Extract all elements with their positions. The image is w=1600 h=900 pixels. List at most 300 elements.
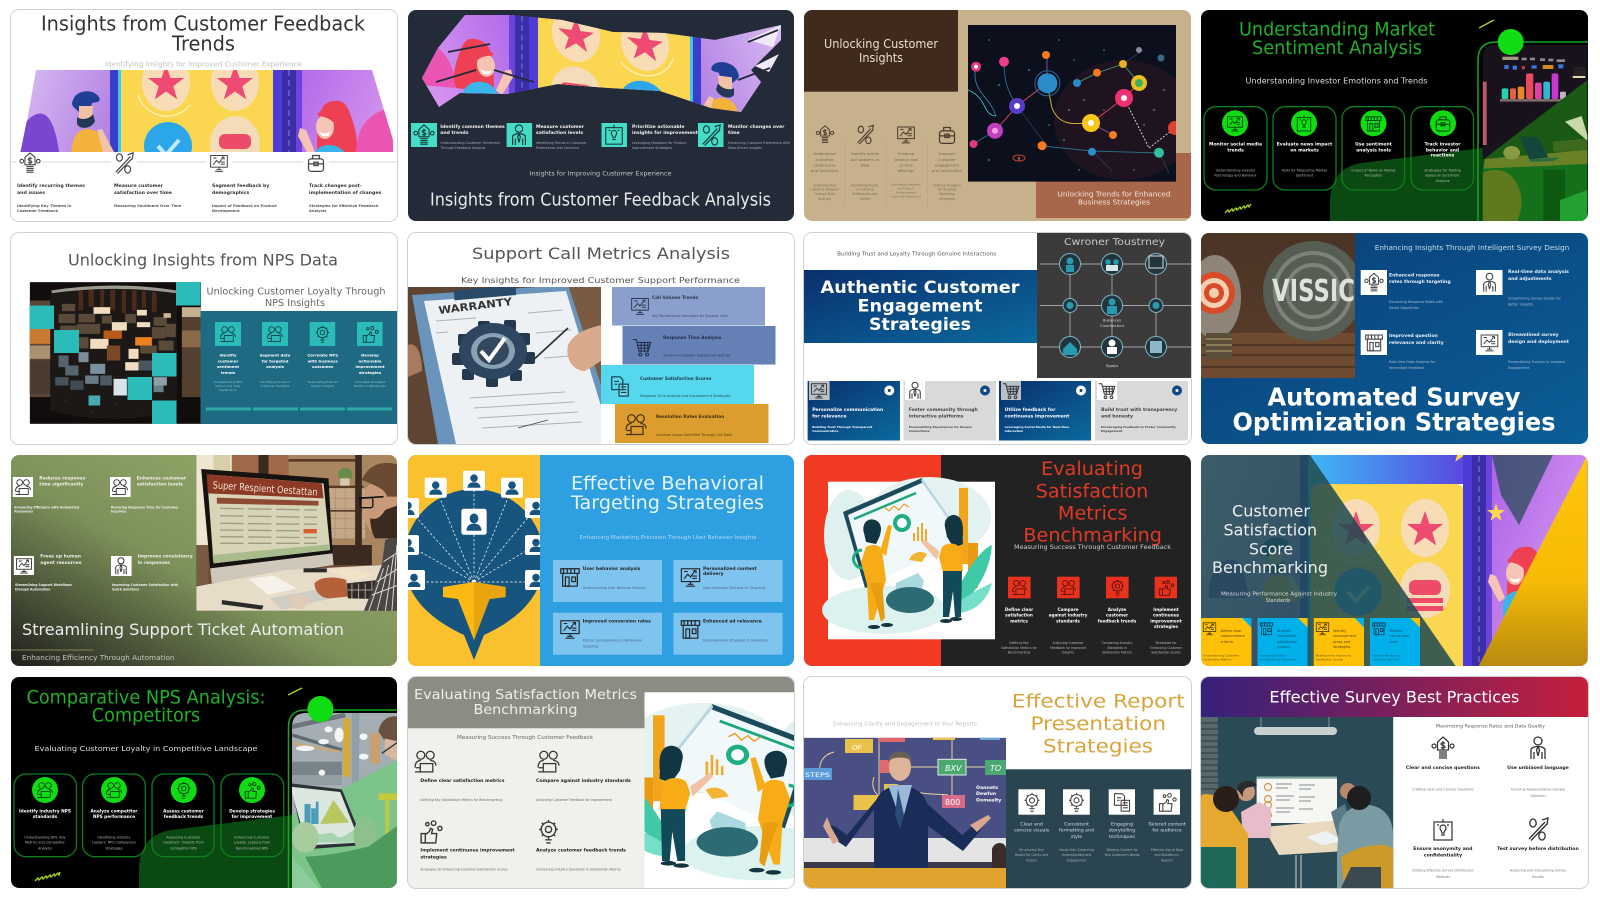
column descriptions: Metrics and Their: [215, 384, 241, 388]
card: personalized content: Data Collection Methods for Targeting: [702, 586, 765, 590]
title: Satisfaction: [1224, 521, 1317, 540]
goals descriptions: Customer Behavior: [810, 188, 840, 192]
practice: test survey: Results: [1532, 875, 1544, 879]
steps headings: Segment feedback by: [212, 183, 269, 189]
column headings: Implement: [1153, 607, 1179, 612]
subtitle: Measuring Performance Against Industry: [1221, 592, 1337, 598]
card: monitor trends: [1370, 618, 1420, 666]
feature descriptions: Preferences and Concerns: [536, 146, 579, 150]
card descriptions: Based on Sentiment: [1425, 174, 1460, 178]
panel: unlocking insights from NPS data: [11, 232, 397, 444]
journey map photo: Cusntfaction: [1100, 322, 1125, 328]
panel: understanding market sentiment analysis: [1201, 10, 1588, 221]
goals descriptions: Customer Experience: [891, 195, 921, 199]
card: build trust: Engagement: [1101, 428, 1123, 432]
column descriptions: Strategies for: [1155, 641, 1177, 645]
feature headings: Prioritize actionable: [632, 124, 684, 130]
column headings: improvement: [1150, 618, 1182, 623]
card: ad relevance: Personalization Strategies in Marketing: [702, 639, 767, 643]
card headings: Evaluate news impact: [1277, 142, 1333, 148]
title: Benchmarking: [1212, 558, 1328, 577]
card: foster community: [904, 380, 996, 440]
panel: streamlining support ticket automation: [11, 455, 397, 666]
title block: Strategies: [869, 314, 971, 334]
strategy descriptions: Report for Clarity and: [1015, 853, 1048, 857]
title block: Engagement: [858, 296, 982, 316]
teal mosaic squares: [29, 282, 200, 424]
card: personalize: Personalize communication: [812, 406, 883, 412]
feature: question relevance: Real-time Data Analysis for: [1389, 360, 1436, 364]
column headings: Segment data: [259, 352, 291, 357]
card: build trust: and honesty: [1101, 413, 1133, 419]
feature: frees up agents: through Automation: [15, 587, 50, 591]
title: Customer: [1232, 502, 1310, 521]
strategy descriptions: Understanding and: [1062, 853, 1091, 857]
card descriptions: Strategies for Trading: [1424, 168, 1461, 172]
column headings: [1005, 607, 1182, 629]
green dot: [307, 696, 333, 722]
photo: trading desk: [1482, 45, 1588, 221]
card: personalized content: delivery: [702, 571, 723, 577]
column descriptions: Satisfaction Scores: [1151, 650, 1181, 654]
feature: question relevance: Immediate Feedback: [1389, 366, 1425, 370]
title block: Insights: [859, 51, 903, 65]
card icons: [32, 777, 265, 803]
card descriptions: Psychology and Behavior: [1214, 174, 1257, 178]
subtitle: Insights for Improving Customer Experience: [529, 171, 671, 178]
title: Satisfaction: [1036, 481, 1148, 502]
steps headings: Measure customer: [114, 183, 163, 189]
card: analyze competitors: competitor: [1277, 634, 1297, 638]
feature: real-time analysis: [1476, 268, 1569, 306]
steps headings: satisfaction over time: [114, 190, 172, 196]
steps headings: demographics: [212, 190, 249, 196]
feature descriptions: Through Feedback Analysis: [439, 146, 485, 150]
card headings: Use sentiment: [1355, 142, 1393, 148]
card: define criteria: Understanding Customer: [1203, 654, 1240, 658]
column descriptions: Satisfaction Metrics: [1102, 650, 1133, 654]
teal content panel: [200, 310, 397, 424]
strategy headings: Clear and: [1020, 821, 1043, 827]
feature: frees up agents: Frees up human: [40, 554, 81, 560]
title block: [804, 270, 1037, 342]
subtitle: Standards: [1266, 598, 1291, 604]
practice: test survey: Analyzing and Interpreting Survey: [1510, 869, 1566, 873]
metric: define: [415, 751, 504, 802]
title: [1239, 19, 1435, 59]
feature: enhances satisfaction: Reducing Response Time for Customer: [111, 505, 179, 509]
subtitle: Unlocking Customer Loyalty Through: [206, 286, 385, 297]
steps descriptions: Identifying Key Themes in: [17, 204, 71, 208]
steps headings: Identify recurring themes: [17, 183, 85, 189]
column descriptions: Satisfaction Metrics for: [1001, 646, 1038, 650]
photo: presenter at board: Oannets: [976, 785, 998, 791]
photo: presenter at board: STEPS: [805, 771, 830, 779]
title: Optimization Strategies: [1232, 407, 1556, 436]
steps descriptions: Analysis: [309, 209, 327, 213]
practice: unbiased language: [1507, 737, 1569, 798]
card descriptions: Analysis: [1436, 179, 1450, 183]
column headings: with business: [307, 358, 338, 363]
brush accents: [436, 25, 780, 82]
column descriptions: Feedback for Improved: [1050, 646, 1086, 650]
column headings: actionable: [358, 358, 382, 363]
feature: frees up agents: Streamlining Support Workflows: [15, 583, 72, 587]
subtitle: Maximizing Response Rates and Data Quality: [1436, 723, 1546, 728]
card: personalize: [808, 380, 900, 440]
goals text: service: [899, 163, 913, 168]
title: Effective Report: [1012, 691, 1185, 712]
goals text: preferences: [813, 163, 836, 168]
feature descriptions: Enhancing Customer Experience with: [728, 141, 789, 145]
feature: streamlined design: Streamlined survey: [1508, 332, 1559, 338]
card descriptions: Strategies: [105, 846, 123, 850]
goals descriptions: in Customer: [856, 188, 875, 192]
feature: enhanced response: [1361, 270, 1451, 310]
strategy descriptions: and Statistics in: [1155, 853, 1179, 857]
title: Benchmarking: [1023, 526, 1162, 547]
trends callout: Unlocking Trends for Enhanced: [1058, 191, 1170, 199]
icon row: [17, 152, 329, 174]
metric block: satisfaction: Customer Satisfaction Scores: [640, 376, 711, 382]
metric: implement: [420, 821, 515, 871]
feature: enhances satisfaction: [110, 475, 187, 514]
subtitle: NPS Insights: [265, 298, 325, 308]
icons row: [816, 125, 954, 144]
goals descriptions: Identifying Trends: [851, 184, 879, 188]
feature: real-time analysis: Streamlining Survey Design for: [1508, 296, 1562, 300]
column descriptions: [1001, 641, 1183, 654]
feature: reduces response: Reduces response: [39, 475, 85, 481]
card: monitor trends: trends over: [1390, 634, 1410, 638]
goals descriptions: Needs: [860, 197, 870, 201]
card: monitor trends: Tools for Measuring: [1371, 654, 1400, 658]
column headings: Correlate NPS: [307, 352, 338, 357]
card: improvement areas: Satisfaction Scores: [1316, 658, 1343, 662]
column headings: [217, 352, 385, 374]
steps descriptions: Customer Feedback: [17, 209, 58, 213]
feature: improves consistency: Improves consistency: [137, 554, 193, 560]
title: Targeting Strategies: [569, 493, 764, 514]
card headings: [1209, 142, 1461, 159]
metric block: response time: [622, 326, 775, 364]
card row: [14, 774, 283, 857]
feature: enhances satisfaction: satisfaction levels: [136, 482, 183, 488]
steps headings: [17, 183, 381, 196]
title: Score: [1249, 539, 1293, 558]
title block: Authentic Customer: [820, 278, 1020, 298]
goals descriptions: Marketing: [939, 192, 955, 196]
strategy descriptions: Engagement: [1067, 859, 1087, 863]
goals descriptions: Leveraging Feedback: [891, 183, 921, 187]
feature headings: time: [728, 130, 739, 136]
column descriptions: Deeper Insights: [311, 384, 334, 388]
title: Support Call Metrics Analysis: [472, 243, 730, 262]
card: utilize feedback: [999, 380, 1091, 440]
card headings: for improvement: [231, 814, 272, 820]
title: Effective Behavioral: [570, 473, 764, 494]
illustration: data network: [968, 25, 1194, 182]
card: build trust: Build trust with transparency: [1101, 406, 1177, 412]
goals descriptions: Enhancement: [896, 191, 917, 195]
column descriptions: Actionable Strategies: [354, 380, 386, 384]
strategy descriptions: Reports: [1161, 859, 1173, 863]
feature headings: Monitor changes over: [728, 124, 785, 130]
practice: anonymity: Utilizing Effective Survey Distribution: [1412, 869, 1474, 873]
goals text: and patterns in: [851, 157, 880, 162]
metric: define: Define clear satisfaction metrics: [420, 778, 504, 784]
column headings: continuous: [1153, 613, 1180, 618]
metric: compare: Compare against industry standards: [536, 778, 630, 784]
title: Unlocking Insights from NPS Data: [68, 250, 338, 269]
metric: analyze: Comparing Industry Standards in Satisfaction Metrics: [536, 867, 621, 871]
column descriptions: Defining Key: [1009, 641, 1029, 645]
card descriptions: Metrics and Competitor: [25, 840, 65, 844]
feature: question relevance: [1361, 330, 1444, 370]
green glow shape: [139, 814, 301, 888]
illustration: dashboard team: [644, 692, 794, 888]
column headings: improvement: [355, 364, 385, 368]
practice: clear questions: Clear and concise questions: [1406, 765, 1480, 771]
subtitle: Enhancing Insights Through Intelligent Survey Design: [1375, 243, 1569, 251]
journey map photo: Cwroner Toustrney: [1064, 236, 1165, 247]
panel: effective survey best practices: [1201, 677, 1588, 888]
title: Trends: [171, 32, 235, 56]
practice: unbiased language: Selection: [1530, 794, 1546, 798]
title: [1012, 691, 1185, 757]
goals text: offerings: [898, 168, 914, 173]
metric block: call volume: Key Performance Indicators for Support Calls: [652, 314, 728, 318]
strategy headings: Tailored content: [1147, 821, 1186, 827]
goals descriptions: Utilizing Analytics: [933, 184, 961, 188]
title: Insights from Customer Feedback: [41, 12, 365, 36]
subtitle: Enhancing Marketing Precision Through User Behavior Insights: [579, 535, 756, 541]
card: monitor trends: Customer Opinions: [1372, 658, 1400, 662]
card headings: on markets: [1290, 147, 1319, 153]
card: utilize feedback: continuous improvement: [1005, 413, 1070, 419]
column descriptions: Based on NPS Results: [354, 384, 386, 388]
metric block: resolution: Common Issues Identified Through Call Data: [656, 432, 731, 436]
metric block: call volume: [612, 286, 764, 325]
metric: compare: Analyzing Customer Feedback for Improvement: [536, 798, 612, 802]
icon tiles: [1018, 789, 1180, 815]
card: user behavior: User behavior analysis: [582, 566, 640, 572]
subtitle: Enhancing Clarity and Engagement in Your Reports: [833, 722, 977, 728]
column descriptions: Analyzing Customer: [1052, 641, 1084, 645]
accent bars: [206, 407, 392, 410]
column headings: standards: [1056, 618, 1080, 623]
card: define criteria: [1201, 618, 1252, 666]
card icons: [1222, 110, 1456, 136]
card: define criteria: Define clear: [1220, 629, 1242, 633]
practice: clear questions: [1406, 737, 1480, 792]
photo: abstract cylinder: [30, 282, 201, 423]
title block: Unlocking Customer: [824, 37, 938, 51]
panel: support call metrics analysis: [408, 232, 794, 444]
card: monitor trends: time: [1390, 640, 1397, 644]
card: analyze competitors: Analyze: [1277, 629, 1291, 633]
feature: enhances satisfaction: Inquiries: [111, 510, 126, 514]
title: Automated Survey: [1268, 382, 1520, 411]
title: [41, 12, 365, 56]
feature descriptions: Leveraging Feedback for Product: [632, 141, 686, 145]
column headings: satisfaction: [1005, 613, 1033, 618]
card: utilize feedback: Utilize feedback for: [1005, 406, 1056, 412]
goals descriptions: for Product: [898, 187, 915, 191]
goals descriptions: Preferences and: [852, 192, 878, 196]
metric: implement: Strategies for Enhancing Customer Satisfaction Scores: [420, 867, 507, 871]
column headings: customer: [1106, 613, 1129, 618]
card descriptions: Impact of News on Market: [1351, 168, 1396, 172]
illustration: brush-stroke customer ratings: [422, 15, 781, 112]
practice: anonymity: confidentiality: [1424, 852, 1462, 858]
steps headings: Track changes post-: [309, 183, 362, 189]
photo: vision bulb and target: [1201, 233, 1355, 378]
tile glyph icons: [220, 325, 378, 342]
feature descriptions: Data-Driven Insights: [728, 146, 762, 150]
title: [1232, 382, 1556, 436]
panel: evaluating satisfaction metrics benchmarking, dark: [804, 455, 1191, 666]
subtitle: Identifying Insights for Improved Customer Experience: [105, 61, 302, 69]
feature headings: [440, 124, 785, 136]
feature: frees up agents: [14, 554, 82, 591]
title: [26, 686, 265, 727]
card: build trust: [1095, 380, 1188, 440]
card descriptions: Leaders: NPS Comparison: [92, 840, 136, 844]
card descriptions: [1214, 168, 1461, 183]
zigzag accents: [35, 688, 302, 881]
column headings: customer: [218, 358, 238, 363]
feature headings: insights for improvement: [632, 130, 698, 136]
feature: streamlined design: Engagement: [1508, 366, 1530, 370]
column headings: strategies: [359, 370, 382, 374]
metric block: satisfaction: Response Time Analysis and Improvement Strategies: [640, 394, 730, 398]
card: define criteria: measurement: [1220, 634, 1246, 638]
column headings: strategies: [1154, 624, 1178, 629]
illustration: dashboard team: [822, 477, 992, 634]
column descriptions: Standards in: [1107, 646, 1127, 650]
photo: presenter at board: BXV: [945, 764, 962, 773]
feature: reduces response: [13, 475, 85, 514]
title: Sentiment Analysis: [1252, 37, 1422, 59]
dark strategies panel: [1006, 769, 1191, 888]
green dot: [1498, 29, 1524, 55]
card: utilize feedback: Interaction: [1005, 428, 1023, 432]
card headings: behavior and: [1426, 147, 1459, 153]
panel: effective behavioral targeting strategies: [408, 455, 794, 666]
panel: insights from customer feedback trends: [11, 10, 397, 221]
steps headings: implementation of changes: [309, 190, 381, 196]
teal icon tiles: [410, 123, 723, 147]
subtitle: Key Insights for Improved Customer Support Performance: [460, 275, 740, 284]
goals text: Enhance: [898, 151, 915, 156]
metric block: call volume: Call Volume Trends: [652, 294, 698, 300]
panel: automated survey optimization strategies: [1201, 233, 1588, 444]
feature: improves consistency: Improving Customer Satisfaction with: [112, 583, 178, 587]
metric: compare: [536, 751, 630, 802]
column headings: Define clear: [1005, 607, 1034, 612]
illustration: rating app: [1201, 426, 1588, 714]
feature: enhanced response: Smart Algorithms: [1389, 306, 1419, 310]
feature headings: satisfaction levels: [536, 130, 583, 136]
card: personalized content: [673, 560, 782, 602]
feature: enhances satisfaction: Enhances customer: [136, 475, 187, 481]
title: [569, 473, 764, 514]
feature descriptions: Identifying Trends in Customer: [536, 141, 587, 145]
goals text: Understand: [813, 151, 836, 156]
goals text: customer: [816, 157, 834, 162]
column headings: sentiment: [217, 364, 239, 368]
practice: anonymity: Methods: [1436, 875, 1450, 879]
card: conversion rates: Ethical Considerations in Behavioral: [582, 639, 642, 643]
card: improvement areas: strategies: [1333, 645, 1351, 649]
column headings: feedback trends: [1098, 618, 1137, 623]
column descriptions: [214, 380, 386, 392]
metric block: resolution: Resolution Rates Evaluation: [656, 414, 724, 420]
metric block: resolution: [614, 404, 768, 442]
card: foster community: interactive platforms: [909, 413, 964, 419]
column headings: Analyze: [1108, 607, 1126, 612]
card: user behavior: Understanding User Behavior Patterns: [582, 586, 646, 590]
column descriptions: Benchmarking: [1008, 650, 1030, 654]
card: conversion rates: Targeting: [581, 644, 598, 648]
card headings: Analyze competitor: [90, 808, 138, 814]
journey map photo: Bukances: [1103, 317, 1121, 322]
card headings: standards: [33, 814, 57, 820]
card descriptions: Benchmarking NPS: [236, 846, 268, 850]
card: utilize feedback: Leveraging Social Media for Real-Time: [1005, 424, 1069, 428]
feature headings: Identify common themes: [440, 124, 505, 130]
card: conversion rates: Improved conversion rates: [582, 619, 651, 625]
card descriptions: Analysis: [38, 846, 52, 850]
column descriptions: Insights: [1062, 650, 1074, 654]
photo: vision bulb and target: VISSIC: [1272, 274, 1355, 308]
title: Competitors: [92, 705, 200, 727]
feature: question relevance: relevance and clarity: [1389, 340, 1444, 346]
column headings: Identify: [219, 352, 237, 357]
card headings: Develop strategies: [229, 808, 275, 814]
metric: implement: strategies: [420, 854, 446, 860]
card: analyze competitors: metrics: [1277, 645, 1290, 649]
phone frame: [1478, 42, 1588, 221]
card headings: Identify industry NPS: [19, 808, 71, 814]
title block: [804, 10, 958, 92]
feature: enhanced response: Enhanced response: [1389, 272, 1439, 278]
card headings: trends: [1227, 147, 1244, 153]
card: analyze competitors: Analyzing Industry: [1260, 654, 1287, 658]
strategy descriptions: Tailoring Content for: [1105, 848, 1138, 852]
card descriptions: Identifying Industry: [97, 835, 130, 839]
steps descriptions: Impact of Feedback on Product: [212, 204, 277, 208]
photo: presenter at board: OF: [852, 744, 863, 752]
goals text: product and: [895, 157, 918, 162]
card headings: analysis tools: [1356, 147, 1391, 153]
panel: effective report presentation strategies: [804, 677, 1190, 888]
photo: presenter at board: TO: [990, 764, 1001, 773]
strategy descriptions: [1015, 848, 1183, 863]
title band: Benchmarking: [473, 702, 577, 718]
goals text: engagement: [935, 163, 960, 168]
panel: evaluating satisfaction metrics benchmarking, light: [408, 677, 794, 888]
metric block: response time: Trends in Customer Satisfaction Ratings: [662, 353, 730, 357]
feature: reduces response: Enhancing Efficiency with Automated: [14, 505, 79, 509]
metric block: satisfaction: [600, 364, 754, 404]
card: personalize: for relevance: [812, 413, 846, 419]
goals descriptions: Strategies: [939, 197, 955, 201]
strategy headings: for audience: [1152, 828, 1182, 834]
goals text: Identify trends: [851, 151, 879, 156]
photo: agent at monitor: Super Respient Oestattan: [212, 480, 318, 499]
